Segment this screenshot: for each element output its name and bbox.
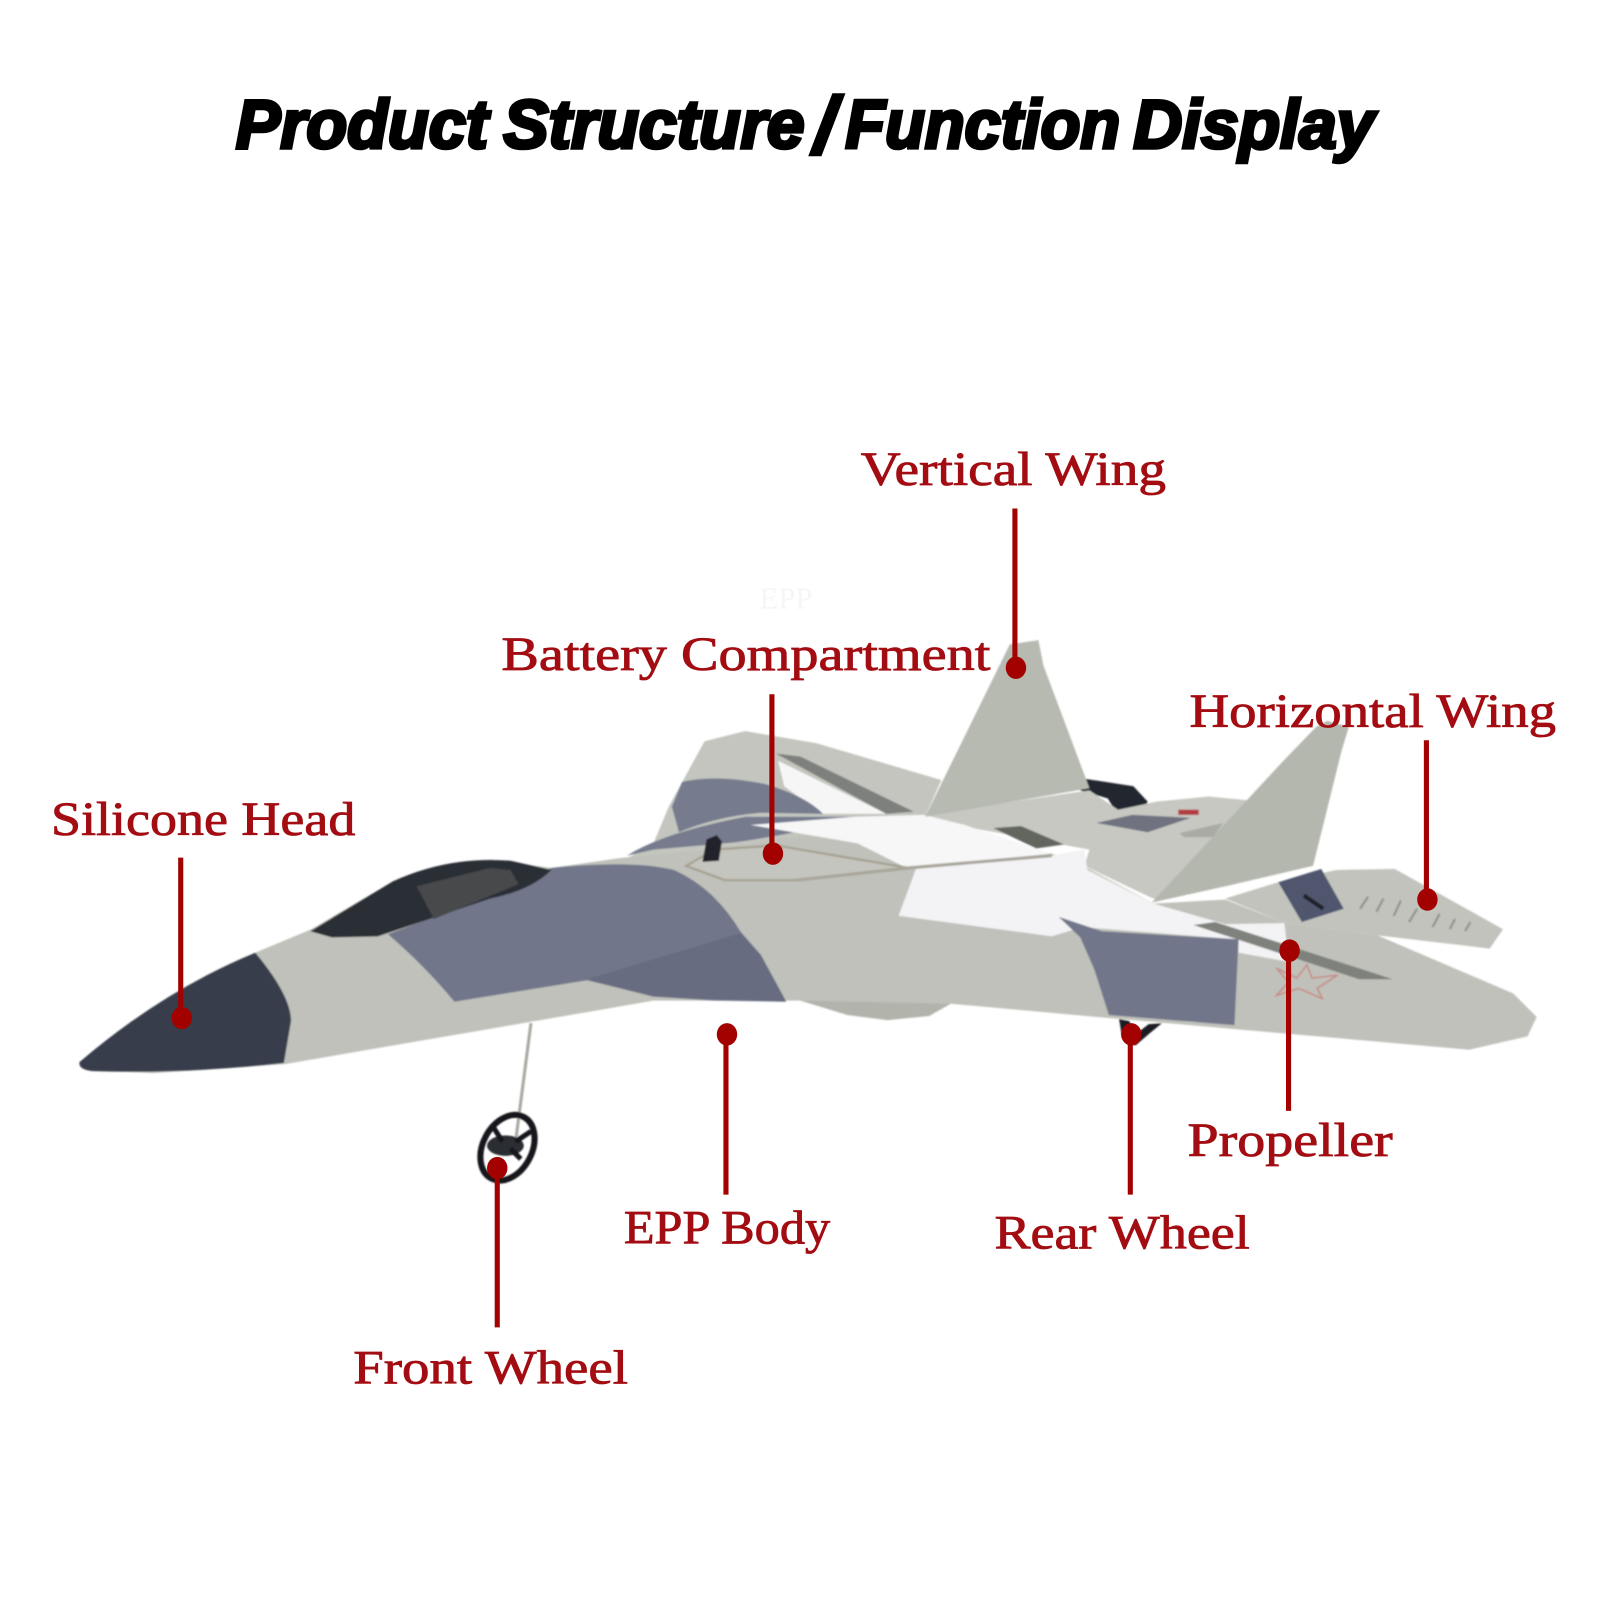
intake fold	[587, 933, 786, 1002]
label: Battery Compartment	[501, 628, 991, 865]
title: Display	[1133, 87, 1377, 163]
title: /	[811, 81, 844, 170]
label: Vertical Wing	[861, 443, 1166, 679]
title: Structure	[503, 87, 805, 163]
battery compartment hatch	[686, 835, 1052, 880]
main fuselage and near wing	[80, 817, 1537, 1073]
label: Horizontal Wing: Horizontal Wing	[1190, 685, 1556, 738]
label: Silicone Head: Silicone Head	[51, 793, 355, 846]
title	[236, 81, 1377, 170]
airplane illustration	[79, 640, 1537, 1190]
tail plane	[1225, 869, 1503, 949]
front wheel	[470, 1105, 545, 1190]
canopy glass highlight	[417, 868, 519, 919]
label: Propeller: Propeller	[1187, 1114, 1393, 1167]
grey camouflage on fuselage	[388, 864, 786, 1002]
vertical wing	[925, 640, 1089, 817]
label: EPP Body	[624, 1023, 830, 1255]
wing strips	[993, 826, 1393, 979]
label: EPP Body: EPP Body	[624, 1202, 830, 1255]
label: Horizontal Wing	[1190, 685, 1556, 911]
faint ghost label: EPP	[760, 582, 812, 616]
underside shadow	[800, 1001, 951, 1020]
horizontal wing fin	[1152, 721, 1349, 903]
rear nozzle	[1080, 778, 1148, 816]
label: Front Wheel	[353, 1157, 628, 1395]
tail plane marks	[1360, 896, 1470, 931]
nose cone: silicone head	[79, 953, 291, 1072]
label: Battery Compartment: Battery Compartment	[501, 628, 991, 681]
rear fuselage	[924, 790, 1264, 901]
near wing camouflage band	[1059, 917, 1239, 1025]
wing star marking	[1276, 965, 1338, 999]
rear panel markings	[1097, 810, 1223, 837]
label: Front Wheel: Front Wheel	[353, 1342, 628, 1395]
title: Product	[236, 87, 491, 163]
label: Rear Wheel	[994, 1023, 1250, 1260]
front wheel strut	[516, 1023, 531, 1142]
tail bracket	[1278, 869, 1344, 922]
white fuselage panels	[750, 815, 1289, 962]
title: Function	[845, 87, 1120, 163]
far wing	[625, 731, 941, 863]
label: Propeller	[1187, 939, 1393, 1167]
label: Rear Wheel: Rear Wheel	[994, 1207, 1250, 1260]
label: Silicone Head	[51, 793, 355, 1029]
rear wheel	[1119, 1019, 1162, 1046]
canopy	[310, 860, 551, 937]
label: Vertical Wing: Vertical Wing	[861, 443, 1166, 496]
